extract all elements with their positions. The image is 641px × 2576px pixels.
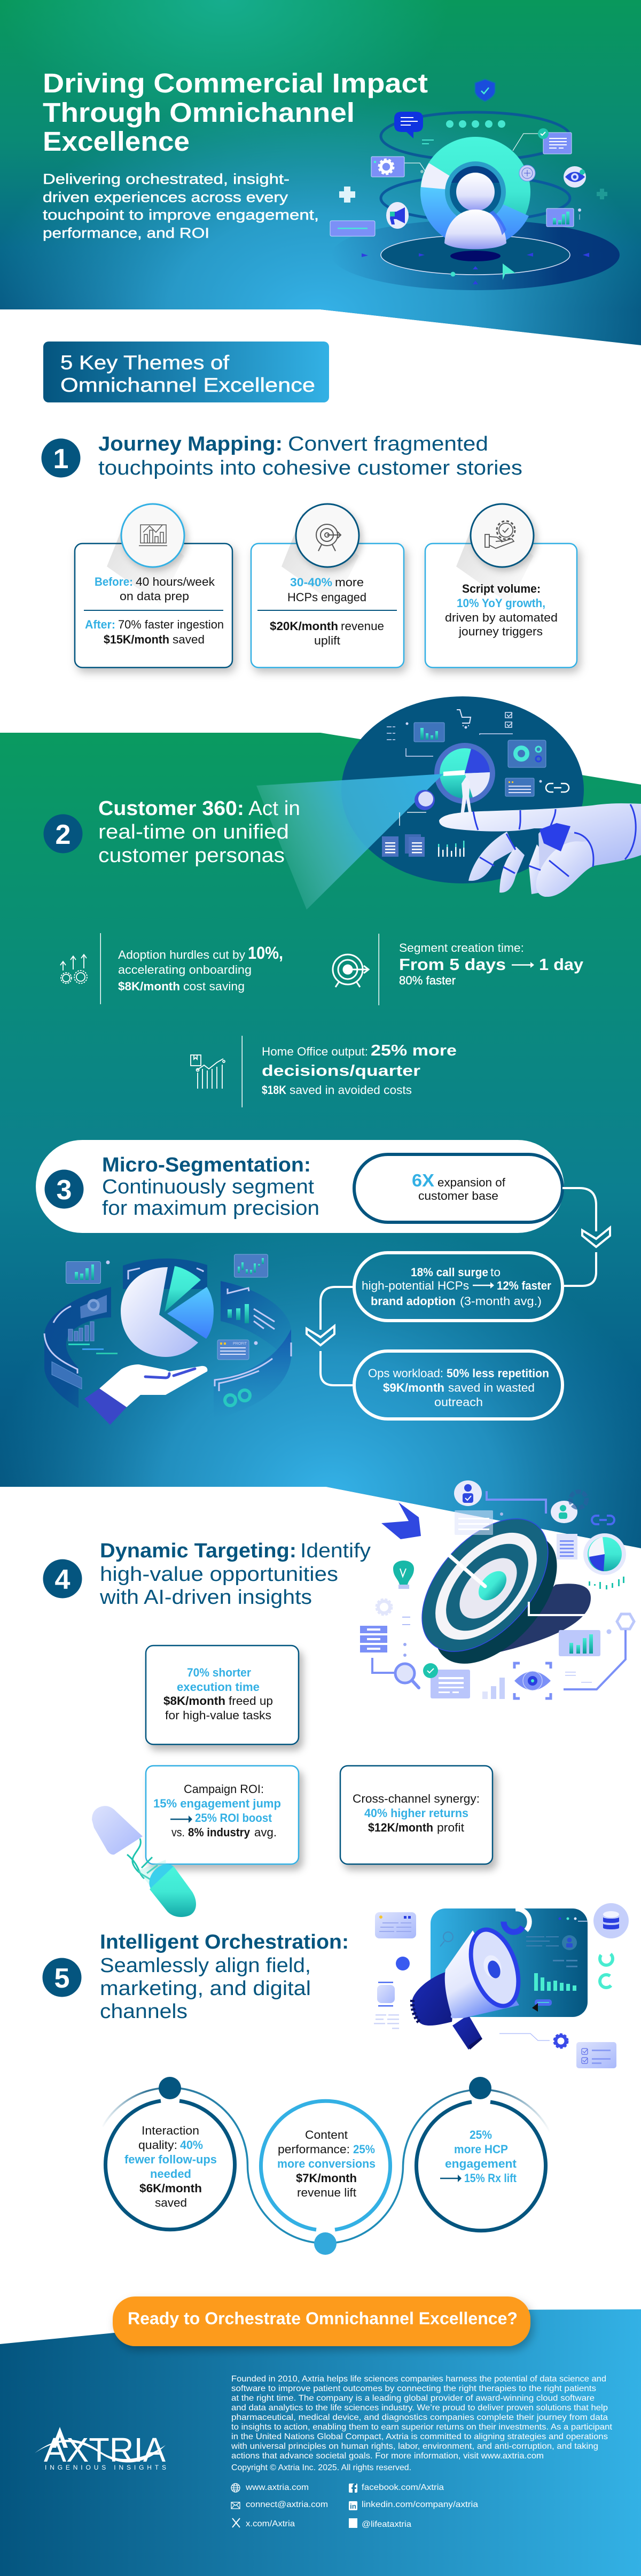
pill: ops workload — [354, 1351, 562, 1419]
card: cross-channel synergy: profit — [437, 1821, 465, 1834]
circle: content performance: revenue lift — [297, 2186, 357, 2199]
section 5 heading: channels — [100, 2000, 187, 2023]
circle: HCP engagement — [416, 2102, 545, 2231]
card: campaign ROI: avg. — [254, 1826, 277, 1839]
card: campaign ROI: 25% ROI boost — [195, 1811, 272, 1825]
title: Through Omnichannel — [43, 97, 355, 128]
card: shorter execution time — [146, 1646, 299, 1744]
section 1 heading: Convert fragmented — [288, 433, 488, 455]
card: more HCPs engaged: HCPs engaged — [287, 591, 366, 604]
card: shorter execution time: for high-value tasks — [165, 1709, 271, 1722]
pill: customer base expansion: 6X — [412, 1170, 434, 1190]
card: script volume: 10% YoY growth, — [457, 596, 545, 610]
subtitle: performance, and ROI — [43, 225, 209, 241]
contact links: facebook.com/Axtria — [362, 2483, 444, 2492]
hero illustration: customer at centre of orbiting channels — [330, 79, 620, 290]
circle: HCP engagement: more HCP — [454, 2143, 508, 2156]
card: more HCPs engaged: 30-40% — [290, 576, 332, 589]
section 3 white pill with heading: for maximum precision — [102, 1197, 319, 1220]
circle: content performance: 25% — [353, 2143, 375, 2156]
card: cross-channel synergy: $12K/month — [368, 1821, 433, 1834]
pill: call surge: (3-month avg.) — [460, 1294, 542, 1308]
section 5 number: 5 — [54, 1963, 69, 1994]
background: sections 2 and 3 band — [0, 733, 641, 1548]
stat: segment creation time: 80% faster — [399, 974, 456, 987]
section 2 heading: customer personas — [98, 844, 285, 867]
subtitle — [43, 171, 319, 241]
arrow: from expansion to call surge — [562, 1188, 610, 1286]
pill: call surge — [354, 1253, 562, 1321]
pill: customer base expansion — [354, 1154, 562, 1222]
about text: at the right time. The company is a leading global provider of award-winning cloud software — [231, 2394, 595, 2403]
circle: interaction quality — [105, 2101, 235, 2230]
title: Excellence — [43, 126, 190, 157]
card: cross-channel synergy: Cross-channel synergy: — [353, 1792, 480, 1805]
pill: ops workload: outreach — [434, 1395, 483, 1409]
stat: adoption hurdles: cost saving — [183, 980, 245, 993]
logo: Axtria: INGENIOUS INSIGHTS — [45, 2464, 166, 2471]
section 4 number: 4 — [55, 1564, 71, 1595]
section 2 heading: real-time on unified — [98, 821, 289, 843]
section 5 illustration: megaphone and dashboard — [374, 1903, 629, 2068]
about text — [231, 2375, 613, 2472]
pill: call surge: 12% faster — [497, 1279, 551, 1292]
circle: interaction quality: $6K/month — [139, 2182, 202, 2195]
contact links: in — [350, 2502, 356, 2510]
card: campaign ROI: Campaign ROI: — [184, 1782, 264, 1796]
card: before and after data prep: on data prep — [120, 589, 189, 603]
card: more HCPs engaged: revenue — [341, 619, 384, 633]
stat: home office output — [191, 1036, 457, 1107]
card: more HCPs engaged: $20K/month — [270, 619, 338, 633]
section 5 number — [43, 1958, 81, 1997]
stat: segment creation time — [333, 934, 584, 1005]
subtitle: driven experiences across every — [43, 189, 288, 205]
circle: interaction quality: needed — [150, 2167, 191, 2181]
section 3 white pill with heading — [36, 1140, 564, 1233]
contact links: @lifeataxtria — [362, 2520, 411, 2529]
stat: adoption hurdles: Adoption hurdles cut by — [118, 948, 246, 961]
card: more HCPs engaged: more — [335, 576, 364, 589]
stat: home office output: decisions/quarter — [262, 1062, 420, 1080]
title — [43, 68, 428, 157]
card: cross-channel synergy: 40% higher returns — [364, 1806, 468, 1820]
stat: adoption hurdles: 10%, — [248, 943, 283, 963]
circle: interaction quality: fewer follow-ups — [124, 2153, 217, 2166]
logo: Axtria: AXTRIA — [44, 2431, 166, 2469]
about text: software to improve patient outcomes by connecting the right therapies to the right patients — [231, 2384, 596, 2393]
stat: home office output: Home Office output: — [262, 1045, 368, 1058]
background: hero band — [0, 0, 641, 345]
section 5 heading: marketing, and digital — [100, 1977, 311, 2000]
section 3 white pill with heading: Micro-Segmentation: — [102, 1154, 311, 1176]
section 1 heading: Journey Mapping: — [98, 433, 283, 455]
stat: segment creation time: From 5 days — [399, 955, 506, 974]
heading badge: 5 key themes: Omnichannel Excellence — [60, 374, 315, 396]
circle: content performance: more conversions — [277, 2157, 376, 2170]
title: Driving Commercial Impact — [43, 68, 428, 98]
section 4 heading: Identify — [300, 1540, 371, 1562]
contact links: linkedin.com/company/axtria — [362, 2500, 478, 2509]
card: shorter execution time: $8K/month — [163, 1694, 225, 1708]
card: before and after data prep: saved — [173, 633, 205, 646]
circle: interaction quality: Interaction — [142, 2124, 199, 2137]
card: campaign ROI: vs. — [171, 1826, 185, 1839]
card: more HCPs engaged — [251, 504, 404, 668]
card: before and after data prep: 40 hours/week — [136, 575, 215, 588]
pill: call surge: brand adoption — [371, 1294, 456, 1308]
card: shorter execution time: freed up — [229, 1694, 273, 1708]
section 4 illustration: target with analytics icons — [360, 1480, 634, 1699]
section 3 illustration: pie chart on open hand with dashboards: PROFIT — [233, 1342, 247, 1346]
stat: adoption hurdles: accelerating onboarding — [118, 963, 252, 976]
circle: interaction quality: quality: — [138, 2138, 177, 2152]
section 5 heading: Intelligent Orchestration: — [100, 1931, 349, 1953]
pill: ops workload: Ops workload: — [368, 1367, 443, 1380]
card: campaign ROI — [146, 1766, 299, 1864]
section 3 number: 3 — [57, 1175, 72, 1206]
circle: content performance: $7K/month — [296, 2171, 357, 2185]
circle: interaction quality: saved — [155, 2196, 187, 2209]
card: before and after data prep: Before: — [95, 575, 133, 588]
card: shorter execution time: execution time — [177, 1680, 260, 1694]
circle: content performance: Content — [305, 2128, 348, 2142]
pill: call surge: to — [490, 1266, 501, 1279]
about text: with universal principles on human rights, labor, environment, and anti-corruption, and taking — [231, 2442, 598, 2451]
card: shorter execution time: 70% shorter — [187, 1666, 251, 1679]
heading badge: 5 key themes — [43, 342, 329, 402]
section 2 illustration: dome with data panels and robot hand — [256, 696, 641, 910]
connected circle outline — [103, 2077, 550, 2255]
icon: capsule with DNA — [92, 1806, 196, 1917]
card: script volume: journey triggers — [458, 625, 543, 638]
card: more HCPs engaged: uplift — [314, 634, 341, 647]
circle: content performance: performance: — [278, 2143, 350, 2156]
circle: content performance — [261, 2101, 390, 2230]
about text: actions that advance societal goals. For more information, visit www.axtria.com — [231, 2451, 544, 2461]
card: campaign ROI: 8% industry — [188, 1826, 250, 1839]
card: script volume: Script volume: — [462, 582, 541, 595]
section 4 number — [43, 1559, 82, 1598]
contact links: connect@axtria.com — [246, 2500, 328, 2509]
stat: home office output: 25% more — [371, 1042, 457, 1059]
stat: adoption hurdles — [60, 933, 283, 1004]
card: before and after data prep: 70% faster ingestion — [118, 618, 224, 631]
about text: Founded in 2010, Axtria helps life sciences companies harness the potential of data science and — [231, 2375, 606, 2384]
pill: ops workload: saved in wasted — [448, 1381, 535, 1394]
about text: and data analytics to the life sciences industry. We’re proud to deliver proven solutions that help — [231, 2403, 608, 2412]
section 5 heading: Seamlessly align field, — [100, 1954, 311, 1977]
section 1 number — [42, 438, 80, 478]
section 4 heading — [99, 1540, 371, 1609]
pill: customer base expansion: expansion of — [437, 1176, 506, 1189]
contact links: x.com/Axtria — [246, 2519, 295, 2528]
background: footer band — [0, 2309, 641, 2576]
section 2 heading — [98, 797, 300, 867]
card: campaign ROI: 15% engagement jump — [153, 1797, 281, 1810]
call to action button — [113, 2296, 530, 2346]
stat: home office output: $18K — [262, 1083, 287, 1097]
circle: HCP engagement: 15% Rx lift — [464, 2171, 517, 2185]
section 3 illustration: pie chart on open hand with dashboards — [44, 1254, 291, 1425]
section 1 heading — [98, 433, 522, 479]
card: script volume: driven by automated — [445, 611, 558, 624]
card: before and after data prep: $15K/month — [104, 633, 169, 646]
card: before and after data prep: After: — [85, 618, 115, 631]
stat: segment creation time: Segment creation time: — [399, 941, 524, 955]
stat: adoption hurdles: $8K/month — [118, 980, 180, 993]
about text: to insights to action, enabling them to earn superior returns on their investments. As a participant — [231, 2423, 613, 2432]
stat: segment creation time: 1 day — [539, 955, 584, 974]
call to action button: Ready to Orchestrate Omnichannel Excellence? — [128, 2309, 518, 2328]
contact links — [231, 2483, 478, 2529]
section 2 number — [44, 814, 82, 853]
circle: HCP engagement: engagement — [445, 2157, 517, 2170]
card: script volume — [425, 504, 577, 668]
about text: pharmaceutical, medical device, and diagnostics companies complete their journey from data — [231, 2413, 608, 2422]
pill: call surge: high-potential HCPs — [362, 1279, 469, 1292]
section 1 heading: touchpoints into cohesive customer stories — [98, 457, 522, 479]
section 2 number: 2 — [56, 819, 71, 850]
pill: customer base expansion: customer base — [418, 1189, 498, 1202]
section 3 white pill with heading: Continuously segment — [102, 1176, 314, 1198]
circle: interaction quality: 40% — [180, 2138, 203, 2152]
heading badge: 5 key themes: 5 Key Themes of — [60, 352, 230, 374]
section 2 heading: Act in — [248, 797, 300, 820]
subtitle: touchpoint to improve engagement, — [43, 207, 319, 223]
section 5 heading — [100, 1931, 349, 2023]
subtitle: Delivering orchestrated, insight- — [43, 171, 290, 187]
contact links: www.axtria.com — [245, 2483, 309, 2492]
section 4 heading: Dynamic Targeting: — [100, 1540, 296, 1562]
circle: HCP engagement: 25% — [470, 2128, 492, 2142]
section 4 heading: with AI-driven insights — [99, 1586, 312, 1609]
section 2 heading: Customer 360: — [98, 797, 244, 820]
card: cross-channel synergy — [340, 1766, 493, 1864]
section 4 heading: high-value opportunities — [100, 1563, 338, 1586]
section 1 number: 1 — [53, 444, 68, 475]
pill: ops workload: 50% less repetition — [447, 1367, 549, 1380]
about text: in the United Nations Global Compact, Axtria is committed to aligning strategies and operations — [231, 2432, 608, 2441]
about text: Copyright © Axtria Inc. 2025. All rights reserved. — [231, 2463, 411, 2472]
section 3 number — [45, 1169, 83, 1209]
pill: ops workload: $9K/month — [383, 1381, 444, 1394]
arrow: from call surge to ops workload — [307, 1287, 353, 1385]
pill: call surge: 18% call surge — [411, 1266, 488, 1279]
card: before and after data prep — [75, 504, 232, 668]
stat: home office output: saved in avoided costs — [290, 1083, 412, 1097]
